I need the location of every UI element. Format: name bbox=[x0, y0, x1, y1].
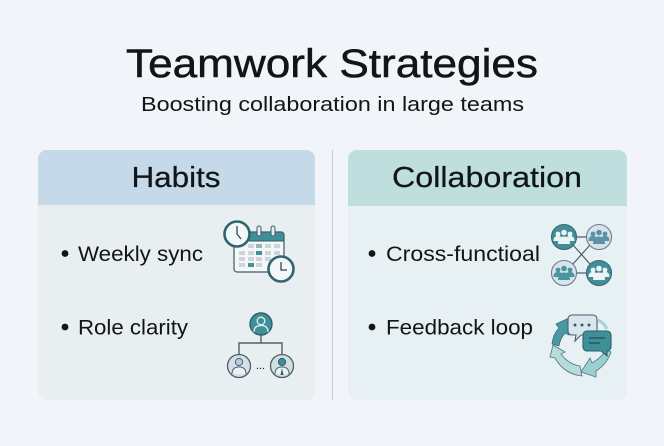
subtitle: Boosting collaboration in large teams bbox=[141, 93, 524, 116]
icon: org chart: ... bbox=[256, 360, 265, 372]
item: weekly sync: Weekly sync bbox=[78, 243, 203, 266]
collaboration heading: Collaboration bbox=[392, 162, 582, 194]
icon: feedback loop bbox=[550, 315, 611, 377]
center divider bbox=[332, 150, 333, 400]
icon: org chart bbox=[228, 313, 294, 378]
collaboration header bbox=[348, 150, 627, 206]
title: Teamwork Strategies bbox=[126, 42, 538, 86]
habits heading: Habits bbox=[132, 162, 220, 194]
panel: collaboration bbox=[348, 150, 627, 400]
item: role clarity: Role clarity bbox=[78, 316, 189, 340]
item: cross-functional: Cross-functioal bbox=[386, 243, 540, 266]
panel: habits bbox=[38, 150, 315, 400]
icon: calendar with clocks bbox=[224, 222, 294, 282]
item: feedback loop: Feedback loop bbox=[386, 316, 533, 340]
habits header bbox=[38, 150, 315, 205]
icon: cross-functional network bbox=[552, 224, 612, 286]
